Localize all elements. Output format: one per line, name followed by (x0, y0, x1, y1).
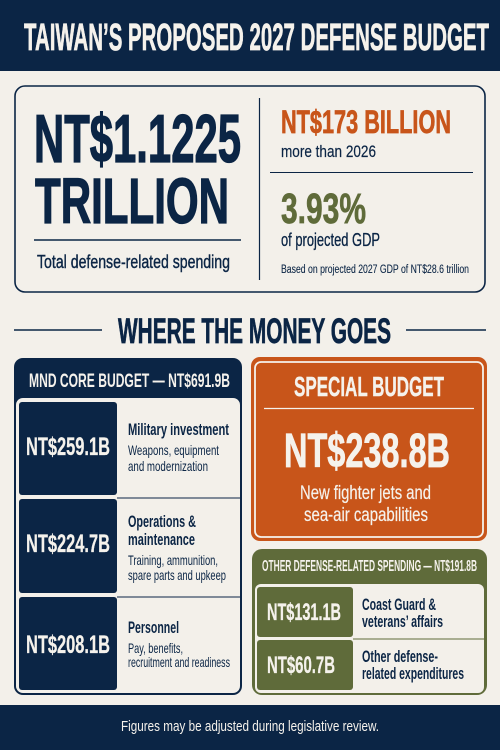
header banner (0, 0, 500, 71)
row: military investment: Military investment (128, 420, 229, 439)
row: military investment: and modernization (128, 458, 208, 474)
row: operations and maintenance: maintenance (128, 530, 195, 549)
row: coast guard (257, 587, 443, 637)
footer (0, 705, 500, 750)
row: personnel: NT$208.1B (26, 631, 110, 659)
row: personnel: recruitment and readiness (128, 654, 230, 670)
row: military investment: Weapons, equipment (128, 442, 219, 458)
row: coast guard: veterans’ affairs (362, 612, 443, 631)
footer: Figures may be adjusted during legislative review. (121, 718, 379, 735)
panel: other defense-related spending (252, 549, 487, 695)
row: other expenditures: Other defense- (362, 647, 438, 666)
total amount: NT$1.1225 (34, 101, 241, 177)
panel: special budget (251, 357, 487, 541)
special budget description: sea-air capabilities (304, 505, 428, 526)
panel: total budget summary (15, 86, 485, 292)
MND heading: MND CORE BUDGET — NT$691.9B (29, 371, 230, 392)
share of GDP (281, 185, 469, 276)
share of GDP: of projected GDP (281, 230, 380, 250)
row: operations and maintenance: Operations & (128, 512, 196, 531)
panel: MND core budget (14, 358, 242, 695)
increase over 2026 (281, 104, 451, 161)
row: other expenditures: NT$60.7B (267, 652, 335, 679)
row: operations and maintenance: NT$224.7B (26, 530, 110, 558)
row: operations and maintenance: spare parts and upkeep (128, 567, 226, 583)
row: military investment (19, 402, 229, 495)
row: personnel: Pay, benefits, (128, 640, 183, 656)
share of GDP: 3.93% (281, 185, 366, 233)
row: operations and maintenance: Training, ammunition, (128, 552, 218, 568)
increase over 2026: more than 2026 (281, 142, 376, 161)
special budget description: New fighter jets and (300, 483, 431, 504)
row: personnel (19, 597, 230, 690)
row: other expenditures (257, 640, 464, 690)
row: operations and maintenance (19, 499, 226, 593)
total amount (34, 101, 241, 237)
total amount: TRILLION (35, 165, 229, 237)
total caption: Total defense-related spending (37, 252, 230, 272)
special budget description (300, 483, 431, 526)
row: coast guard: Coast Guard & (362, 595, 436, 614)
row: personnel: Personnel (128, 618, 179, 637)
row: military investment: NT$259.1B (26, 433, 110, 461)
row: coast guard: NT$131.1B (267, 599, 341, 626)
